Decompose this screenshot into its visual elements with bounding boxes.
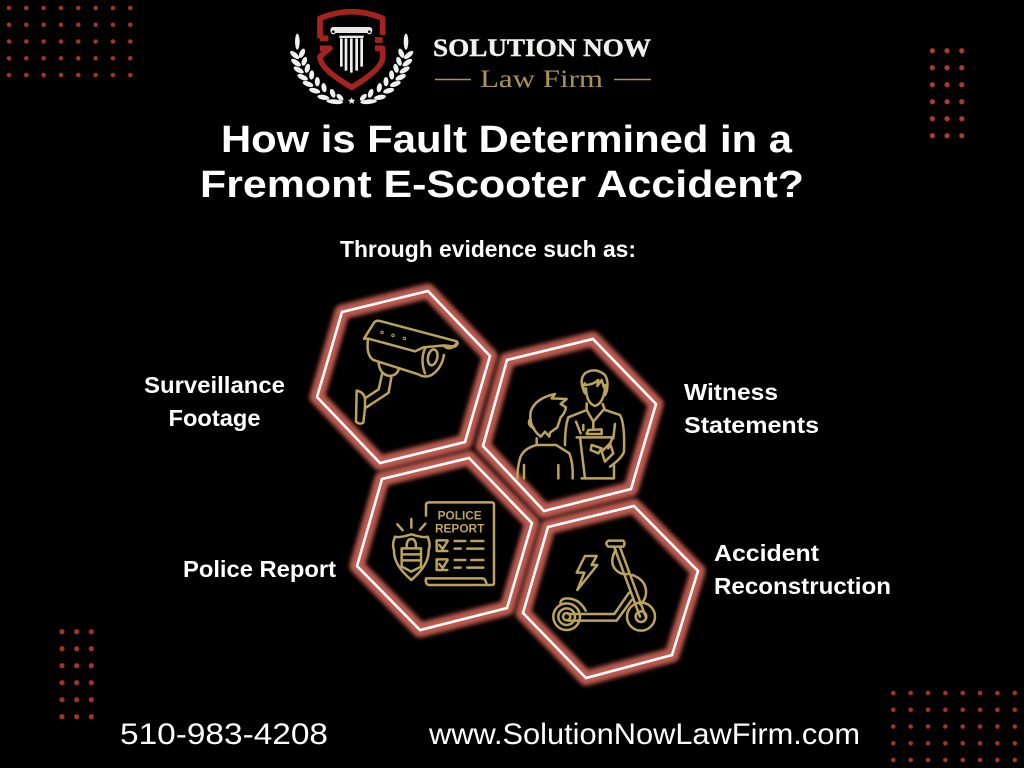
officer [582, 370, 607, 395]
logo [289, 12, 651, 105]
label: witness statements: Statements [684, 412, 819, 438]
dot pattern: top left [0, 0, 139, 84]
subtitle: Through evidence such as: [340, 236, 636, 262]
label: witness statements [684, 379, 819, 438]
title [200, 119, 804, 206]
website: www.SolutionNowLawFirm.com [428, 718, 860, 751]
shield [320, 12, 383, 87]
icon: witness and officer [517, 370, 624, 478]
label: surveillance footage: Footage [168, 405, 260, 431]
report label: POLICE [438, 509, 482, 522]
title: How is Fault Determined in a [221, 119, 793, 161]
label: accident reconstruction: Accident [714, 540, 819, 566]
icon: security camera [356, 321, 458, 424]
column [331, 30, 371, 73]
left laurel [289, 34, 345, 105]
icon: electric scooter [553, 541, 655, 631]
hexagon: witness statements [483, 339, 656, 511]
label: accident reconstruction [714, 540, 891, 599]
hexagon: police report [357, 458, 532, 630]
witness [530, 394, 567, 437]
label: accident reconstruction: Reconstruction [714, 573, 891, 599]
report label [435, 509, 484, 535]
dot pattern: bottom left [55, 623, 99, 725]
icon: police report document [393, 502, 494, 585]
dot pattern: top right [925, 42, 969, 144]
law firm subtitle: Law Firm [480, 66, 604, 93]
logo emblem [289, 12, 415, 105]
hexagon: surveillance footage [317, 291, 490, 463]
dot pattern: bottom right [885, 685, 1024, 768]
phone number: 510-983-4208 [120, 718, 328, 751]
firm name: SOLUTION NOW [433, 35, 651, 62]
label: surveillance footage: Surveillance [144, 372, 285, 398]
label: surveillance footage [144, 372, 285, 431]
right laurel [359, 34, 415, 105]
star [348, 97, 355, 104]
label: police report: Police Report [183, 556, 336, 582]
title: Fremont E-Scooter Accident? [200, 164, 804, 206]
label: witness statements: Witness [684, 379, 778, 405]
report label: REPORT [435, 522, 484, 535]
hexagon: accident reconstruction [523, 506, 698, 678]
